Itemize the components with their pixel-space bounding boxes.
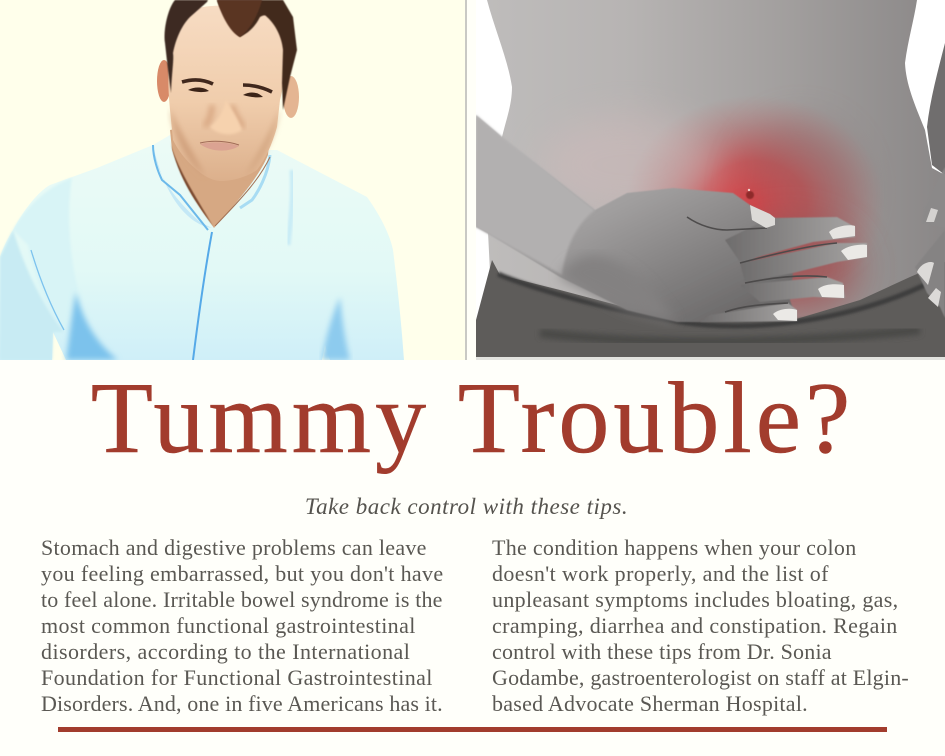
text block: right column: based Advocate Sherman Hospital. (492, 691, 808, 716)
text block: right column: control with these tips from Dr. Sonia (492, 639, 832, 664)
shirt (0, 135, 404, 360)
text block: left column: Disorders. And, one in five Americans has it. (41, 691, 443, 716)
ears (157, 60, 169, 102)
navel (746, 191, 754, 199)
divider (465, 0, 467, 360)
dark arm behind at right edge (927, 43, 945, 175)
text block: left column: Foundation for Functional Gastrointestinal (41, 665, 433, 690)
fingers (725, 217, 855, 262)
head (168, 6, 285, 181)
red glow (644, 106, 867, 275)
text block: left column: to feel alone. Irritable bowel syndrome is the (41, 587, 443, 612)
subtitle: Take back control with these tips. (305, 494, 628, 519)
fingernails (750, 205, 775, 228)
text block: left column: you feeling embarrassed, but you don't have (41, 561, 443, 586)
text block: right column: unpleasant symptoms includes bloating, gas, (492, 587, 898, 612)
other hand at right edge (915, 167, 945, 318)
title: Tummy Trouble? (91, 362, 854, 475)
text block: left column (41, 535, 443, 716)
text block: left column: Stomach and digestive problems can leave (41, 535, 427, 560)
neck (170, 130, 268, 228)
text block: right column: Godambe, gastroenterologist on staff at Elgin- (492, 665, 909, 690)
photo banner (0, 0, 945, 360)
trousers (476, 260, 945, 357)
brows and eyes (182, 80, 213, 84)
text block: right column (492, 535, 909, 716)
bottom rule (58, 727, 887, 732)
hair (165, 0, 208, 93)
torso (487, 0, 945, 340)
text block: right column: doesn't work properly, and the list of (492, 561, 829, 586)
forearm and hand (476, 115, 867, 322)
text block: right column: cramping, diarrhea and constipation. Regain (492, 613, 898, 638)
text block: right column: The condition happens when your colon (492, 535, 856, 560)
nose and mouth (211, 105, 242, 134)
text block: left column: disorders, according to the International (41, 639, 410, 664)
panel: left photo of man (0, 0, 465, 360)
text block: left column: most common functional gastrointestinal (41, 613, 416, 638)
panel: right photo of abdomen (476, 0, 945, 357)
